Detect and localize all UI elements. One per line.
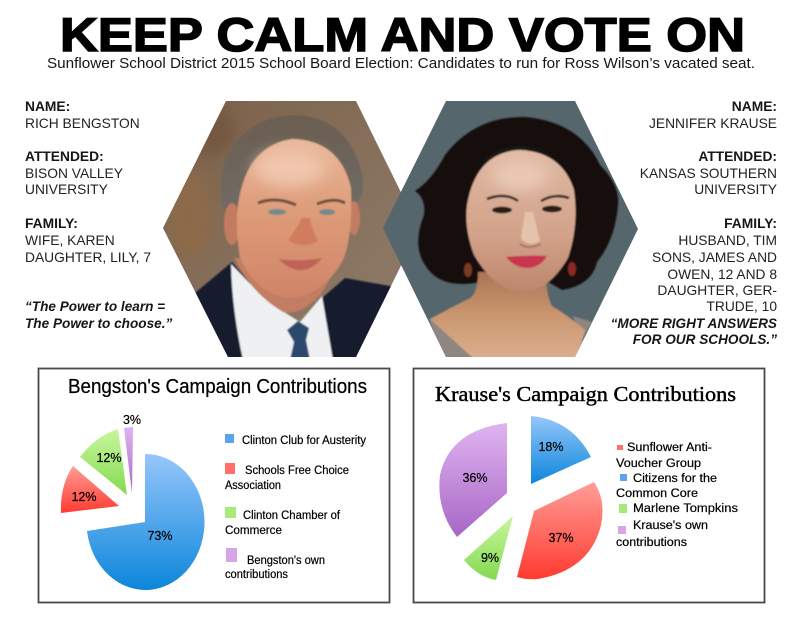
pie chart: Bengston: 12% <box>71 490 97 504</box>
candidate profile: Rich Bengston: WIFE, KAREN <box>25 233 115 248</box>
candidate profile: Rich Bengston: The Power to choose.” <box>25 316 172 331</box>
brows <box>258 200 345 205</box>
legend: Bengston: Bengston's own <box>247 555 325 567</box>
candidate profile: Rich Bengston: UNIVERSITY <box>25 182 108 197</box>
legend: Bengston: Clinton Chamber of <box>243 510 341 522</box>
candidate profile: Jennifer Krause: ATTENDED: <box>698 149 777 164</box>
panel: Bengston's campaign contributions <box>38 368 390 602</box>
legend: Bengston: Commerce <box>225 525 282 537</box>
legend: Krause: contributions <box>616 537 687 549</box>
earrings <box>464 263 472 277</box>
nose <box>521 212 540 244</box>
suit <box>195 262 392 357</box>
candidate profile: Rich Bengston <box>25 99 172 331</box>
pie chart: Krause: 36% <box>462 471 488 485</box>
candidate profile: Jennifer Krause: OWEN, 12 AND 8 <box>667 267 777 282</box>
pie chart: Krause <box>439 416 602 580</box>
neck <box>234 258 340 313</box>
candidate profile: Rich Bengston: ATTENDED: <box>25 149 104 164</box>
candidate profile: Jennifer Krause: FOR OUR SCHOOLS.” <box>633 332 777 347</box>
pie chart: Bengston: 73% <box>147 529 173 543</box>
candidate profile: Jennifer Krause: SONS, JAMES AND <box>652 250 777 265</box>
eyes <box>492 207 512 213</box>
ears <box>224 203 240 245</box>
candidate profile: Jennifer Krause: UNIVERSITY <box>694 182 777 197</box>
eyes <box>268 209 286 215</box>
subtitle: Sunflower School District 2015 School Board Election: Candidates to run for Ross Wilson’s vacated seat. <box>47 56 755 72</box>
legend: Krause: Citizens for the <box>633 473 717 485</box>
candidate profile: Rich Bengston: NAME: <box>25 99 70 114</box>
hair <box>415 117 618 290</box>
candidate profile: Jennifer Krause: DAUGHTER, GER- <box>657 283 777 298</box>
legend: Krause: Sunflower Anti- <box>627 442 712 454</box>
pie chart: Bengston <box>61 413 204 590</box>
pie chart: Krause: 9% <box>481 551 499 565</box>
candidate profile: Jennifer Krause: “MORE RIGHT ANSWERS <box>611 316 777 331</box>
clothing <box>429 316 592 360</box>
candidate profile: Rich Bengston: FAMILY: <box>25 216 78 231</box>
neck and chest <box>430 272 585 358</box>
face <box>237 139 351 298</box>
pie chart: Bengston: 3% <box>123 413 141 427</box>
candidate profile: Rich Bengston: “The Power to learn = <box>25 299 165 314</box>
legend: Krause: Marlene Tompkins <box>633 503 738 515</box>
legend: Krause <box>616 442 738 549</box>
mouth <box>506 256 547 268</box>
legend: Bengston: Schools Free Choice <box>245 465 349 477</box>
face <box>466 150 576 292</box>
panel: Krause's campaign contributions <box>414 368 764 602</box>
candidate profile: Rich Bengston: BISON VALLEY <box>25 166 123 181</box>
legend: Bengston: Clinton Club for Austerity <box>242 435 366 447</box>
candidate profile: Jennifer Krause: TRUDE, 10 <box>706 299 777 314</box>
mouth <box>279 258 322 270</box>
legend: Krause: Common Core <box>616 488 698 500</box>
shirt <box>231 264 333 360</box>
pie chart: Krause: 18% <box>538 440 564 454</box>
chart title: Krause's Campaign Contributions <box>435 382 736 406</box>
pie chart: Bengston: 12% <box>96 451 122 465</box>
candidate profile: Jennifer Krause: FAMILY: <box>724 216 777 231</box>
chart title: Bengston's Campaign Contributions <box>68 376 367 398</box>
pie chart: Krause: 37% <box>548 531 574 545</box>
legend: Krause: Krause's own <box>633 520 708 532</box>
legend: Bengston <box>225 434 366 581</box>
title: KEEP CALM AND VOTE ON <box>60 8 745 61</box>
candidate profile: Rich Bengston: DAUGHTER, LILY, 7 <box>25 250 151 265</box>
legend: Bengston: Association <box>225 480 281 492</box>
candidate profile: Jennifer Krause: KANSAS SOUTHERN <box>640 166 777 181</box>
tie <box>287 321 310 360</box>
hair <box>221 115 363 212</box>
portrait: Jennifer Krause hexagon <box>380 100 640 360</box>
candidate profile: Jennifer Krause: HUSBAND, TIM <box>678 233 777 248</box>
candidate profile: Jennifer Krause: JENNIFER KRAUSE <box>649 116 777 131</box>
nose <box>288 218 318 245</box>
portrait: Rich Bengston hexagon <box>163 101 402 357</box>
candidate profile: Jennifer Krause <box>611 99 777 347</box>
legend: Bengston: contributions <box>225 569 288 581</box>
candidate profile: Jennifer Krause: NAME: <box>732 99 777 114</box>
brows <box>487 196 569 201</box>
legend: Krause: Voucher Group <box>616 458 701 470</box>
candidate profile: Rich Bengston: RICH BENGSTON <box>25 116 140 131</box>
